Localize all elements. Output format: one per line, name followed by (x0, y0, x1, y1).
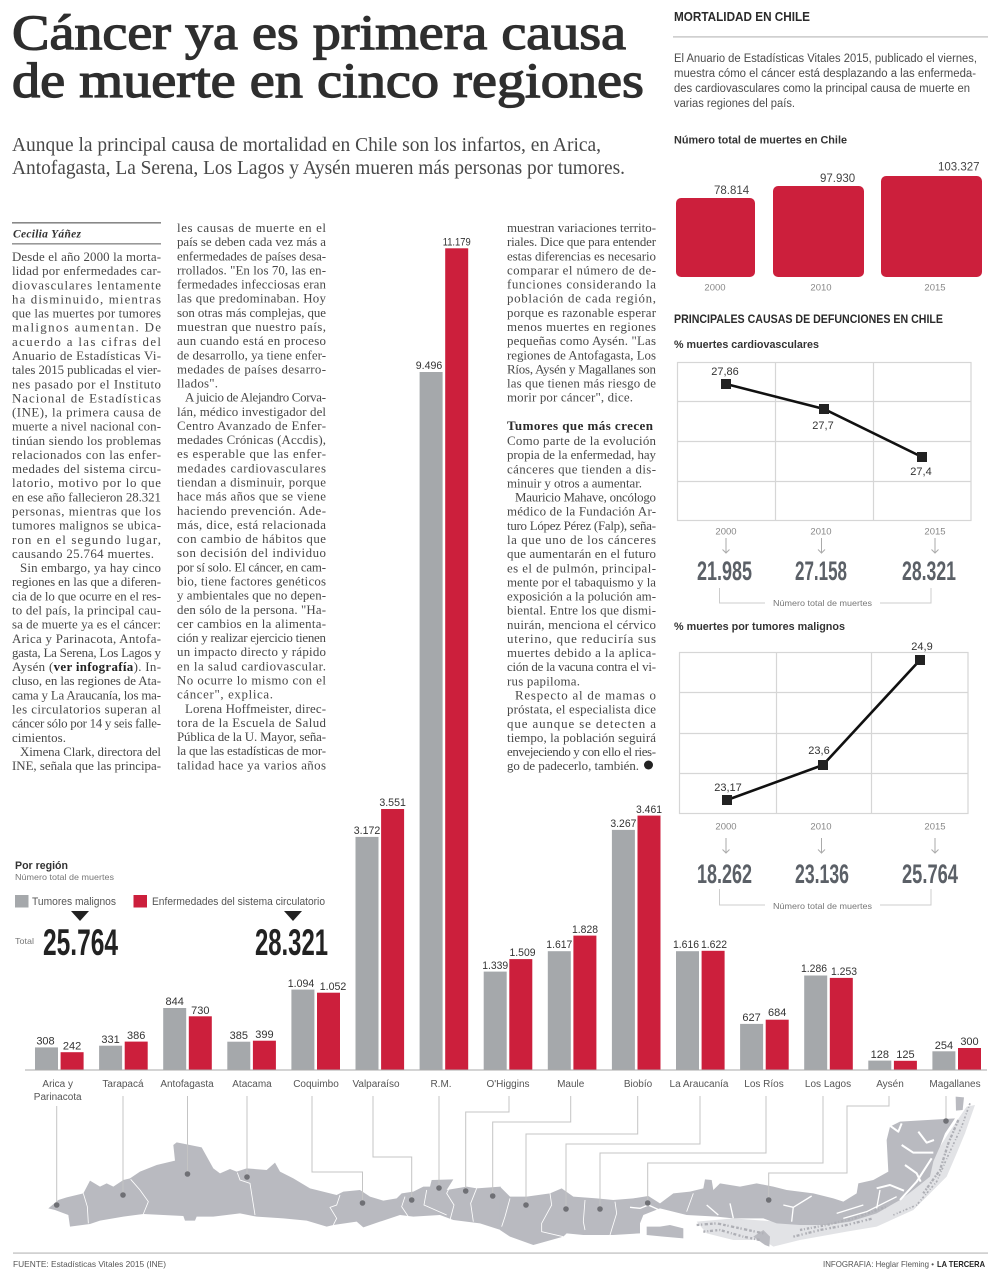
article column 2: y ambientales que no depen- (177, 589, 326, 603)
chart: total deaths in Chile: 78.814 (714, 185, 750, 197)
line chart: cardiovascular deaths: 27,86 (711, 366, 739, 378)
article column 3: exposición a la polución am- (507, 590, 656, 604)
totals: tumour deaths (697, 859, 958, 889)
article column 1: gasta, La Serena, Los Lagos y (12, 646, 162, 660)
article column 1: que las muertes por tumores (12, 307, 161, 321)
bracket: total deaths note: Número total de muertes (773, 598, 872, 608)
article column 3: Respecto al de mamas o (515, 688, 656, 702)
bar values: 3.267 (610, 818, 636, 830)
article column 2: tora de la Escuela de Salud (177, 716, 327, 730)
bar values: 254 (935, 1040, 953, 1052)
chart: total deaths in Chile: 2000 (704, 282, 726, 294)
article column 1: ron en el segundo lugar, (12, 533, 161, 547)
article column 2: No ocurre lo mismo con el (177, 674, 326, 688)
bar values: 627 (742, 1012, 761, 1024)
line chart: malignant tumour deaths: 24,9 (911, 641, 933, 653)
article column 1: nes pasado por el Instituto (12, 377, 161, 391)
subtitle: Aunque la principal causa de mortalidad en Chile son los infartos, en Arica, (12, 135, 601, 156)
subtitle: Antofagasta, La Serena, Los Lagos y Aysén mueren más personas por tumores. (12, 158, 625, 179)
article column 2: de desarrollo, ya tiene enfer- (177, 348, 326, 362)
article column 3: que aunque se detecten a (507, 717, 656, 731)
article column 3: muestran variaciones territo- (507, 221, 656, 235)
article column 3: próstata, el especialista dice (507, 703, 656, 717)
chart: total deaths in Chile (676, 162, 982, 294)
article column 3: go de padecerlo, también. (507, 759, 639, 773)
heading: total deaths chart: Número total de muertes en Chile (674, 134, 847, 146)
legend: por región: Número total de muertes (15, 872, 114, 882)
sidebar intro text: El Anuario de Estadísticas Vitales 2015, publicado el viernes, (674, 53, 977, 65)
article column 3: tiempo, la población seguirá (507, 731, 656, 745)
heading: main causes: PRINCIPALES CAUSAS DE DEFUNCIONES EN CHILE (674, 312, 943, 326)
article column 2: tiendan a disminuir, porque (177, 476, 326, 490)
article column 3: uterino, que reduciría sus (507, 632, 656, 646)
bar values: 1.509 (510, 947, 536, 959)
years and arrows: cardiovascular (715, 526, 946, 553)
article column 3: Tumores que más crecen (507, 418, 654, 433)
bar values: 399 (255, 1029, 274, 1041)
totals: tumour deaths: 18.262 (697, 859, 752, 889)
article column 3: morir por cáncer", dice. (507, 391, 633, 405)
article column 2: haciendo prevención. Ade- (177, 504, 326, 518)
article column 2: den sólo de la persona. "Ha- (177, 603, 326, 617)
article column 1: les circulatorios superan al (12, 702, 161, 716)
article column 1: INE, señala que las principa- (12, 759, 161, 773)
line chart: cardiovascular deaths (677, 362, 971, 520)
region labels: Atacama (232, 1079, 272, 1090)
article column 3: minuir y otros a aumentar. (507, 476, 642, 490)
totals: cardiovascular deaths: 27.158 (795, 556, 847, 586)
line chart: cardiovascular deaths: 27,7 (812, 420, 834, 432)
article column 2: Pública de la U. Mayor, seña- (177, 730, 326, 744)
article column 1: to del país, la principal cau- (12, 604, 161, 618)
years and arrows: cardiovascular: 2000 (715, 526, 737, 538)
legend: por región (15, 860, 325, 908)
article column 1: ha disminuido, mientras (12, 292, 161, 306)
article column 2: talidad hace ya varios años (177, 758, 326, 772)
years and arrows: cardiovascular: 2010 (810, 526, 832, 538)
article column 3: ción de la vacuna contra el vi- (507, 660, 656, 674)
article column 2: Lorena Hoffmeister, direc- (185, 702, 326, 716)
sidebar intro text: varias regiones del país. (674, 98, 795, 110)
article column 2: medades Crónicas (Accdis), (177, 433, 326, 447)
article column 1: Sin embargo, ya hay cinco (20, 561, 161, 575)
map dots (54, 1118, 949, 1212)
article column 1: Ximena Clark, directora del (20, 745, 161, 759)
region labels: Los Lagos (805, 1079, 851, 1090)
article column 2 (177, 221, 327, 772)
article column 3: las que tienen más riesgo de (507, 376, 656, 390)
article column 1: causando 25.764 muertes. (12, 547, 154, 561)
article column 3: Ríos, Aysén y Magallanes son (507, 362, 657, 376)
article column 2: lán, médico investigador del (177, 405, 326, 419)
article column 1: tumores malignos se ubica- (12, 519, 161, 533)
article column 1: acuerdo a las cifras del (12, 335, 161, 349)
region labels: Parinacota (34, 1092, 82, 1103)
title (12, 4, 644, 108)
sidebar intro text (674, 53, 977, 110)
article column 2: es esperable que las enfer- (177, 447, 326, 461)
totals: cardiovascular deaths: 28.321 (902, 556, 956, 586)
totals: tumour deaths: 25.764 (902, 859, 958, 889)
national totals: 25.764 (43, 922, 118, 963)
article column 1: sa de muerte ya es el cáncer: (12, 618, 161, 632)
article column 1: (INE), la primera causa de (12, 406, 161, 420)
footer: LA TERCERA (937, 1259, 985, 1269)
article column 1: latorio, motivo por lo que (12, 476, 161, 490)
article column 2: medades cardiovasculares (177, 461, 326, 475)
footer: INFOGRAFIA: Heglar Fleming • (823, 1259, 934, 1269)
article column 3: Como parte de la evolución (507, 434, 657, 448)
bar values: 844 (166, 996, 184, 1008)
article column 2: cer cambios en la alimenta- (177, 617, 326, 631)
article column 2: la que las estadísticas de mor- (177, 744, 326, 758)
article column 2: son otras más complejas, que (177, 306, 326, 320)
article column 3: nuirán, menciona el cérvico (507, 618, 656, 632)
bar values: 300 (960, 1036, 979, 1048)
article column 2: medades de países desarro- (177, 362, 326, 376)
article column 1 (12, 250, 162, 773)
bar values: 1.339 (482, 960, 508, 972)
bar chart: deaths by region (25, 236, 987, 1070)
region labels: La Araucanía (670, 1079, 729, 1090)
bar values: 1.094 (288, 978, 314, 990)
subtitle (12, 135, 625, 179)
bar values: 308 (36, 1036, 55, 1048)
national totals (15, 911, 328, 963)
region labels (34, 1079, 981, 1103)
article column 2: hace más años que se viene (177, 490, 326, 504)
bracket: total deaths note (720, 588, 931, 608)
bar values: 331 (101, 1034, 120, 1046)
line chart: malignant tumour deaths: 23,6 (808, 745, 830, 757)
sidebar intro text: des cardiovasculares como la principal causa de muerte en (674, 83, 970, 95)
years and arrows: tumours: 2010 (810, 822, 832, 832)
article column 3: regiones de Antofagasta, Los (507, 348, 656, 362)
article column 2: con cambio de hábitos que (177, 532, 326, 546)
region labels: Magallanes (929, 1079, 981, 1090)
article column 2: las que predominaban. Hoy (177, 292, 327, 306)
article column 2: llados". (177, 376, 218, 390)
region labels: Biobío (624, 1079, 653, 1090)
article column 3: riales. Dice que para entender (507, 235, 657, 249)
article column 3: la que uno de los cánceres (507, 533, 656, 547)
article column 1: cama y La Araucanía, los ma- (12, 688, 161, 702)
bar values: 125 (896, 1049, 915, 1061)
chart: total deaths in Chile: 2010 (810, 282, 832, 294)
sidebar intro text: muestra cómo el cáncer está desplazando a las enfermeda- (674, 68, 976, 80)
bar values: 242 (63, 1040, 81, 1052)
chart: total deaths in Chile: 103.327 (938, 162, 980, 174)
bar values: 684 (768, 1007, 786, 1019)
article column 2: país se deben cada vez más a (177, 235, 326, 249)
region labels: Arica y (42, 1079, 73, 1090)
region labels: Coquimbo (293, 1079, 339, 1090)
bar values: 1.253 (831, 966, 857, 978)
years and arrows: cardiovascular: 2015 (924, 526, 946, 538)
region labels: Maule (557, 1079, 585, 1090)
article column 1: cáncer sólo por 14 y seis falle- (12, 717, 161, 731)
article column 3: pequeñas como Aysén. "Las (507, 334, 656, 348)
article column 2: muestran que nuestro país, (177, 320, 326, 334)
article column 3: envejeciendo y con ello el ries- (507, 745, 656, 759)
bar values: 128 (871, 1049, 889, 1061)
chart: total deaths in Chile: 97.930 (820, 173, 855, 185)
years and arrows: tumours (715, 822, 946, 853)
bar values: 730 (191, 1005, 209, 1017)
article column 2: son decisión del individuo (177, 546, 326, 560)
bracket: total deaths note (720, 889, 931, 911)
bar values: 1.052 (320, 981, 346, 993)
article column 3: médico de la Fundación Ar- (507, 505, 656, 519)
article column 3: cánceres que tienden a dis- (507, 462, 656, 476)
article column 2: más, dice, está relacionada (177, 518, 326, 532)
bar values: 11.179 (443, 236, 471, 248)
footer: FUENTE: Estadísticas Vitales 2015 (INE) (13, 1259, 166, 1269)
article column 3: porque es razonable esperar (507, 306, 657, 320)
article column 2: aun cuando está en proceso (177, 334, 326, 348)
legend: por región: Por región (15, 860, 68, 872)
chart: total deaths in Chile: 2015 (924, 282, 946, 294)
bar values: 9.496 (416, 360, 442, 372)
article column 3: que aumentarán en el futuro (507, 547, 656, 561)
bar values (36, 236, 979, 1061)
article column 1: cimientos. (12, 731, 66, 745)
national totals: Total (15, 936, 34, 946)
totals: cardiovascular deaths (697, 556, 956, 586)
bar values: 3.172 (354, 825, 380, 837)
bracket: total deaths note: Número total de muertes (773, 901, 872, 911)
map of Chile (48, 1097, 975, 1247)
article column 1: muerte a nivel nacional con- (12, 420, 161, 434)
article column 2: un impacto directo y rápido (177, 645, 326, 659)
article column 1: relacionados con las enfer- (12, 448, 161, 462)
article column 1: regiones en las que a diferen- (12, 575, 161, 589)
article column 2: Centro Avanzado de Enfer- (177, 419, 326, 433)
article column 2: les causas de muerte en el (177, 221, 326, 235)
article column 3: muertes debido a la aplica- (507, 646, 656, 660)
article column 1: personas, mientras que los (12, 504, 161, 518)
article column 3: estas diferencias es necesario (507, 249, 656, 263)
heading: malignant tumours: % muertes por tumores malignos (674, 621, 845, 633)
article column 3: población de cada región, (507, 292, 656, 306)
article column 1: Desde el año 2000 la morta- (12, 250, 161, 264)
article column 1: diovasculares lentamente (12, 278, 161, 292)
region labels: R.M. (430, 1079, 452, 1090)
article column 3: Mauricio Mahave, oncólogo (515, 491, 656, 505)
article column 1: cluso, en las regiones de Ata- (12, 674, 161, 688)
article column 2: enfermedades de países desa- (177, 249, 326, 263)
article column 1: malignos aumentan. De (12, 321, 161, 335)
article column 3: propia de la enfermedad, hay (507, 448, 657, 462)
article column 1: tales 2015 publicadas el vier- (12, 363, 161, 377)
article column 3 (507, 221, 657, 773)
article column 3: mente por el tabaquismo y la (507, 575, 656, 589)
bar values: 1.828 (572, 924, 598, 936)
article column 2: cáncer", explica. (177, 688, 273, 702)
region labels: Aysén (876, 1079, 904, 1090)
years and arrows: tumours: 2000 (715, 822, 737, 832)
bar values: 1.617 (546, 939, 572, 951)
legend: por región: Tumores malignos (32, 896, 116, 908)
sidebar heading: mortalidad en Chile: MORTALIDAD EN CHILE (674, 10, 810, 24)
legend: por región: Enfermedades del sistema circulatorio (152, 896, 325, 908)
article column 3: biental. Entre los que dismi- (507, 604, 656, 618)
region labels: Los Ríos (744, 1079, 784, 1090)
article column 3: es el de pulmón, principal- (507, 561, 656, 575)
article column 1: Aysén (ver infografía). In- (12, 660, 161, 674)
years and arrows: tumours: 2015 (924, 822, 946, 832)
region labels: Valparaíso (352, 1079, 400, 1090)
totals: tumour deaths: 23.136 (795, 859, 849, 889)
region labels: Tarapacá (102, 1079, 144, 1090)
leader lines from labels to map (57, 1096, 946, 1209)
bar values: 3.461 (636, 804, 662, 816)
article column 1: Nacional de Estadísticas (12, 391, 161, 405)
article column 3: funciones considerando la (507, 278, 656, 292)
article column 1: lidad por enfermedades car- (12, 264, 161, 278)
article column 2: rrollados. "En los 70, las en- (177, 263, 326, 277)
article column 1: Arica y Parinacota, Antofa- (12, 632, 161, 646)
region labels: O'Higgins (486, 1079, 530, 1090)
line chart: malignant tumour deaths (679, 641, 968, 814)
bar values: 1.616 (673, 939, 699, 951)
article column 3: rus papiloma. (507, 674, 580, 688)
article column 3: menos muertes en regiones (507, 320, 656, 334)
title: Cáncer ya es primera causa (12, 4, 626, 60)
article column 2: fermedades infecciosas eran (177, 278, 327, 292)
line chart: cardiovascular deaths: 27,4 (910, 466, 932, 478)
article column 2: A juicio de Alejandro Corva- (185, 391, 326, 405)
article column 2: ción y realizar ejercicio tienen (177, 631, 327, 645)
article column 2: por sí solo. El cáncer, en cam- (177, 560, 326, 574)
article column 1: tinúan siendo los problemas (12, 434, 161, 448)
article column 3: comparar el número de de- (507, 263, 656, 277)
bar values: 1.622 (701, 939, 727, 951)
line chart: malignant tumour deaths: 23,17 (714, 782, 742, 794)
article column 2: en la salud cardiovascular. (177, 659, 326, 673)
national totals: 28.321 (255, 922, 328, 963)
bar values: 386 (127, 1030, 145, 1042)
region labels: Antofagasta (160, 1079, 214, 1090)
byline: Cecilia Yáñez (13, 228, 82, 240)
bar values: 3.551 (379, 797, 406, 809)
heading: cardiovascular: % muertes cardiovasculares (674, 339, 819, 351)
article column 1: Anuario de Estadísticas Vi- (12, 349, 161, 363)
article column 1: medades del sistema circu- (12, 462, 161, 476)
bar values: 1.286 (801, 963, 827, 975)
article column 1: cia de lo que ocurre en el res- (12, 589, 161, 603)
totals: cardiovascular deaths: 21.985 (697, 556, 752, 586)
article column 2: bio, tiene factores genéticos (177, 574, 326, 588)
footer (13, 1252, 988, 1269)
title: de muerte en cinco regiones (12, 52, 644, 108)
article column 3: turo López Pérez (Falp), seña- (507, 519, 656, 533)
bar values: 385 (230, 1030, 248, 1042)
article column 1: en ese año fallecieron 28.321 (12, 490, 161, 504)
